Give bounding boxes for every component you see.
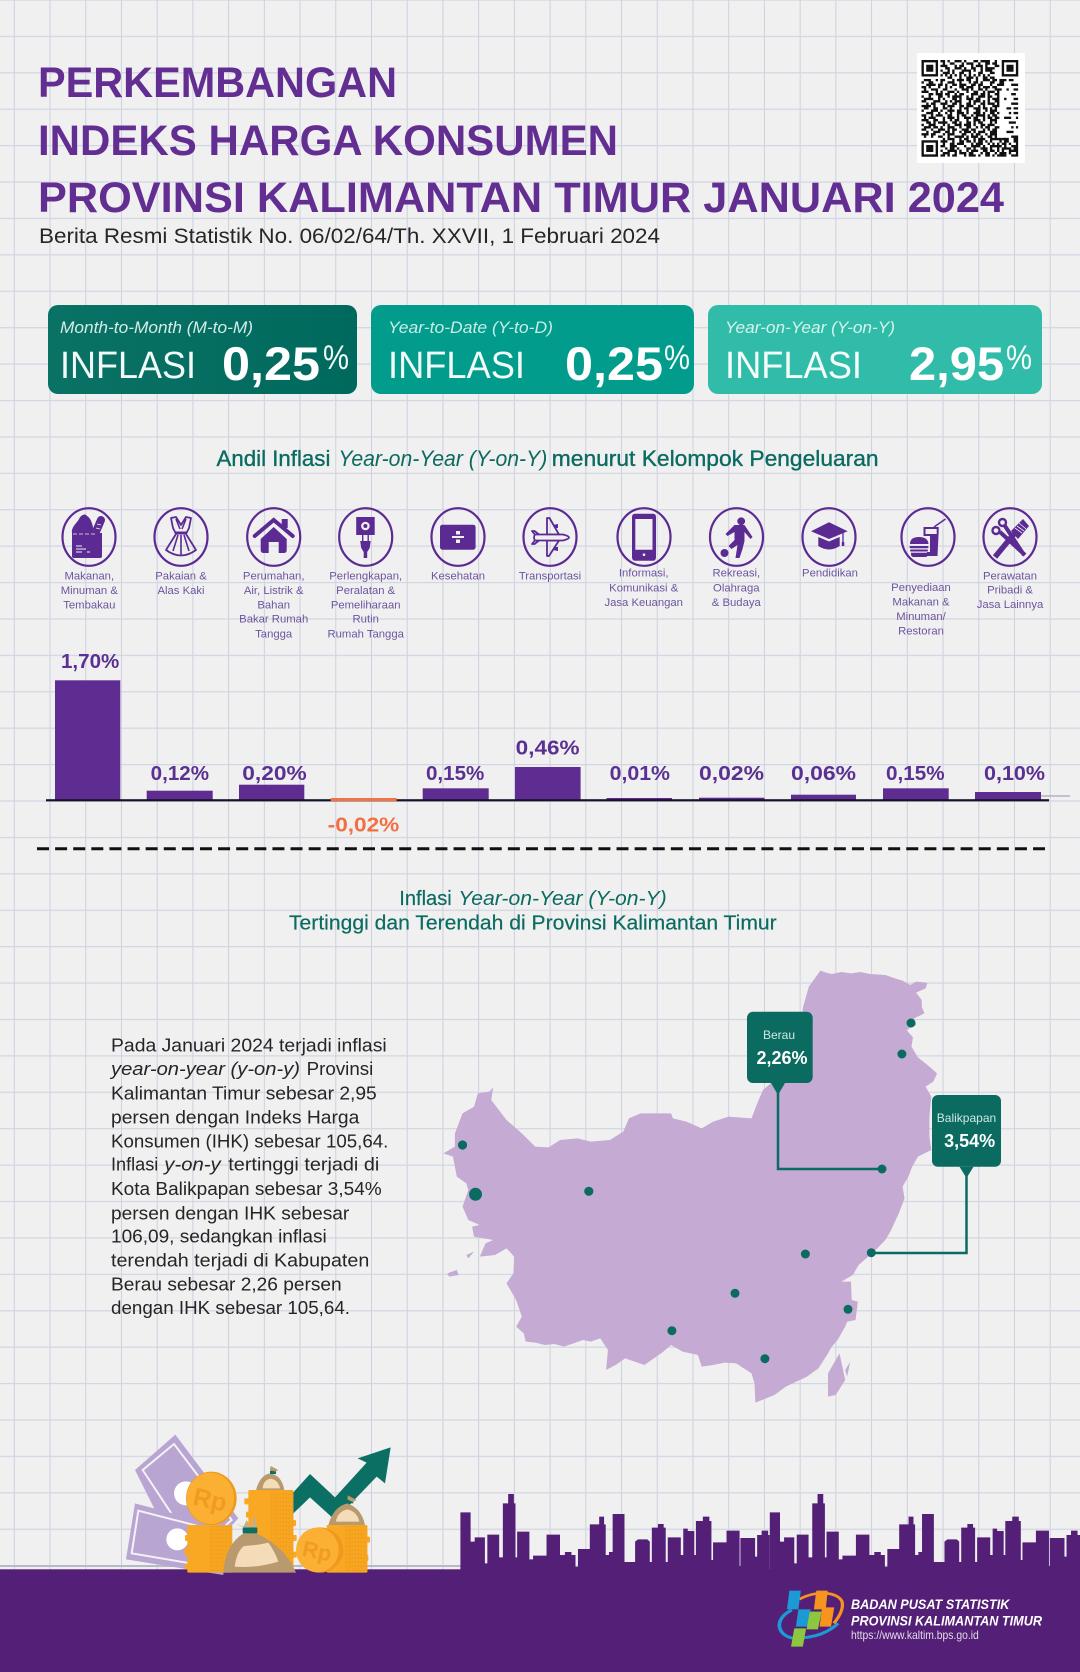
category labels: Perawatan — [983, 570, 1037, 582]
callout: Balikpapan — [867, 1095, 1001, 1257]
footer text: agency name: BADAN PUSAT STATISTIK — [851, 1596, 1010, 1612]
title — [38, 59, 1004, 222]
QR code — [917, 53, 1025, 163]
text block: summary: Provinsi — [307, 1058, 373, 1079]
category labels: Bakar Rumah — [239, 614, 308, 626]
category labels: Makanan, — [64, 570, 114, 582]
text block: summary — [109, 1035, 388, 1318]
category labels: Tembakau — [63, 600, 115, 612]
footer text: agency name — [851, 1596, 1043, 1642]
category labels: Olahraga — [713, 583, 760, 595]
category labels: Pakaian & — [155, 570, 207, 582]
category labels: Penyediaan — [891, 582, 951, 594]
text block: summary: Kalimantan Timur sebesar 2,95 — [111, 1082, 377, 1103]
category labels: Peralatan & — [336, 585, 396, 597]
category labels: Bahan — [257, 600, 290, 612]
heading: highest and lowest inflation — [289, 887, 777, 934]
bar chart: -0,02% — [328, 814, 399, 837]
category labels: Rumah Tangga — [327, 628, 405, 640]
subtitle: Berita Resmi Statistik No. 06/02/64/Th. XXVII, 1 Februari 2024 — [39, 225, 660, 248]
icon: food service — [902, 508, 954, 566]
bar chart: 0,01% — [610, 762, 670, 785]
coin left — [186, 1472, 237, 1525]
category labels: Informasi, — [619, 568, 669, 580]
panel: year-on-year inflation: Year-on-Year (Y-on-Y) — [725, 318, 895, 337]
panel: year-to-date inflation: Year-to-Date (Y-to-D) — [388, 318, 553, 337]
panel: year-to-date inflation — [371, 305, 694, 394]
icon: communication — [618, 508, 670, 566]
text block: summary: y-on-y — [162, 1154, 223, 1175]
category labels: Perumahan, — [243, 570, 304, 582]
title: PERKEMBANGAN — [38, 59, 397, 107]
bar chart: 0,15% — [426, 762, 484, 785]
title: PROVINSI KALIMANTAN TIMUR JANUARI 2024 — [38, 174, 1004, 222]
category labels: Perlengkapan, — [329, 570, 402, 582]
bar chart: 0,46% — [516, 736, 580, 759]
category labels: & Budaya — [712, 597, 762, 609]
heading: contribution by expenditure group — [216, 446, 879, 471]
icon: education — [802, 508, 856, 566]
icon: personal care — [984, 508, 1036, 566]
coin left: Rp — [190, 1483, 229, 1517]
map: Kalimantan — [443, 971, 937, 1403]
callout: Balikpapan: 3,54% — [944, 1131, 995, 1151]
category labels: Pemeliharaan — [331, 600, 401, 612]
heading: contribution by expenditure group: menurut Kelompok Pengeluaran — [552, 446, 879, 471]
panel: month-to-month inflation: 0,25 — [222, 337, 320, 390]
text block: summary: Konsumen (IHK) sebesar 105,64. — [111, 1130, 388, 1151]
category labels: Komunikasi & — [609, 583, 679, 595]
category labels: Pribadi & — [987, 585, 1033, 597]
panel: month-to-month inflation: % — [323, 339, 349, 377]
money bag large — [223, 1515, 296, 1573]
category labels: Pendidikan — [802, 568, 858, 580]
bar chart: 1,70% — [61, 650, 119, 673]
panel: year-on-year inflation: INFLASI — [725, 345, 862, 387]
coin stack middle — [244, 1490, 297, 1570]
callout: Berau: Berau — [763, 1028, 795, 1042]
category labels: Air, Listrik & — [244, 585, 304, 597]
text block: summary: 106,09, sedangkan inflasi — [111, 1226, 327, 1247]
text block: summary: year-on-year (y-on-y) — [109, 1058, 300, 1079]
bar chart: 0,12% — [151, 762, 209, 785]
heading: contribution by expenditure group: Andil Inflasi — [216, 446, 330, 471]
money bag right — [328, 1495, 365, 1525]
title: INDEKS HARGA KONSUMEN — [38, 117, 618, 165]
text block: summary: Pada Januari 2024 terjadi inflasi — [111, 1035, 387, 1056]
callout: Berau — [747, 1012, 886, 1174]
coin right: Rp — [300, 1536, 334, 1566]
panel: year-to-date inflation: INFLASI — [388, 345, 525, 387]
category labels: Tangga — [255, 628, 293, 640]
category labels: Restoran — [898, 626, 944, 638]
panel: year-on-year inflation — [708, 305, 1042, 394]
category labels: Jasa Keuangan — [604, 597, 683, 609]
text block: summary: Kota Balikpapan sebesar 3,54% — [111, 1178, 382, 1199]
heading: highest and lowest inflation: Year-on-Year (Y-on-Y) — [458, 887, 667, 910]
category labels: Rutin — [353, 614, 379, 626]
category labels: Makanan & — [892, 596, 950, 608]
text block: summary: Berau sebesar 2,26 persen — [111, 1274, 342, 1295]
icon: clothing — [154, 508, 208, 566]
category labels: Jasa Lainnya — [977, 599, 1044, 611]
footer text: agency name: PROVINSI KALIMANTAN TIMUR — [851, 1613, 1043, 1629]
text block: summary: persen dengan Indeks Harga — [111, 1106, 360, 1127]
panel: year-to-date inflation: % — [664, 339, 690, 377]
bar chart: 0,15% — [886, 762, 945, 785]
category labels: Rekreasi, — [712, 568, 760, 580]
bar chart — [46, 650, 1070, 837]
arrow — [290, 1447, 391, 1520]
footer band with skyline — [0, 1494, 1080, 1672]
text block: summary: Inflasi — [111, 1154, 158, 1175]
panel: month-to-month inflation: Month-to-Month (M-to-M) — [60, 318, 253, 337]
coin right — [296, 1527, 343, 1573]
category labels — [61, 568, 1044, 640]
category labels: Transportasi — [519, 570, 581, 582]
category labels: Kesehatan — [431, 570, 485, 582]
callout: Balikpapan: Balikpapan — [937, 1111, 996, 1125]
bar chart: 0,02% — [699, 762, 764, 785]
footer text: agency name: https://www.kaltim.bps.go.id — [851, 1628, 979, 1642]
category labels: Alas Kaki — [157, 585, 205, 597]
icon: health — [432, 508, 484, 566]
icon: food and beverage — [62, 508, 116, 566]
heading: contribution by expenditure group: Year-on-Year (Y-on-Y) — [338, 446, 547, 471]
icon: transport — [524, 508, 576, 566]
panel: year-on-year inflation: 2,95 — [909, 337, 1004, 390]
heading: highest and lowest inflation: Tertinggi dan Terendah di Provinsi Kalimantan Timur — [289, 911, 777, 934]
icon: housing — [247, 508, 300, 566]
text block: summary: tertinggi terjadi di — [228, 1154, 379, 1175]
heading: highest and lowest inflation: Inflasi — [399, 887, 452, 910]
category labels: Minuman & — [61, 585, 118, 597]
bar chart: 0,10% — [984, 762, 1045, 785]
callout: Berau: 2,26% — [756, 1048, 808, 1068]
coin stack left — [184, 1525, 232, 1573]
logo: BPS — [779, 1591, 842, 1647]
category labels: Minuman/ — [896, 611, 947, 623]
bar chart: 0,20% — [242, 762, 307, 785]
banknotes — [126, 1435, 238, 1575]
icon: household equipment — [339, 508, 392, 566]
bar chart: 0,06% — [791, 762, 856, 785]
illustration: money, coins and rising arrow — [126, 1435, 391, 1575]
icon: recreation — [710, 508, 763, 566]
money bag top — [256, 1466, 284, 1490]
panel: year-on-year inflation: % — [1006, 339, 1032, 377]
panel: year-to-date inflation: 0,25 — [565, 337, 663, 390]
panel: month-to-month inflation: INFLASI — [60, 345, 196, 387]
text block: summary: dengan IHK sebesar 105,64. — [111, 1297, 350, 1318]
panel: month-to-month inflation — [48, 305, 357, 394]
coin stack right — [327, 1525, 370, 1573]
text block: summary: persen dengan IHK sebesar — [111, 1202, 349, 1223]
text block: summary: terendah terjadi di Kabupaten — [111, 1250, 369, 1271]
